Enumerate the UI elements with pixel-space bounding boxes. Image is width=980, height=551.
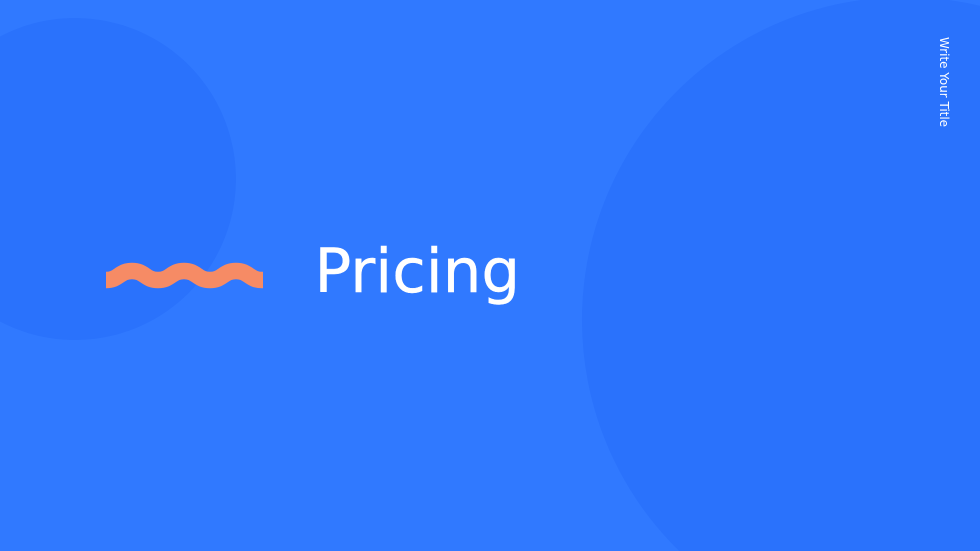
title: Pricing: Pricing bbox=[314, 236, 520, 307]
icon: orange wave bbox=[106, 271, 263, 280]
vertical header: Write Your Title: Write Your Title bbox=[937, 37, 951, 127]
background circle: left bbox=[0, 18, 236, 340]
background circle: right bbox=[582, 0, 980, 551]
